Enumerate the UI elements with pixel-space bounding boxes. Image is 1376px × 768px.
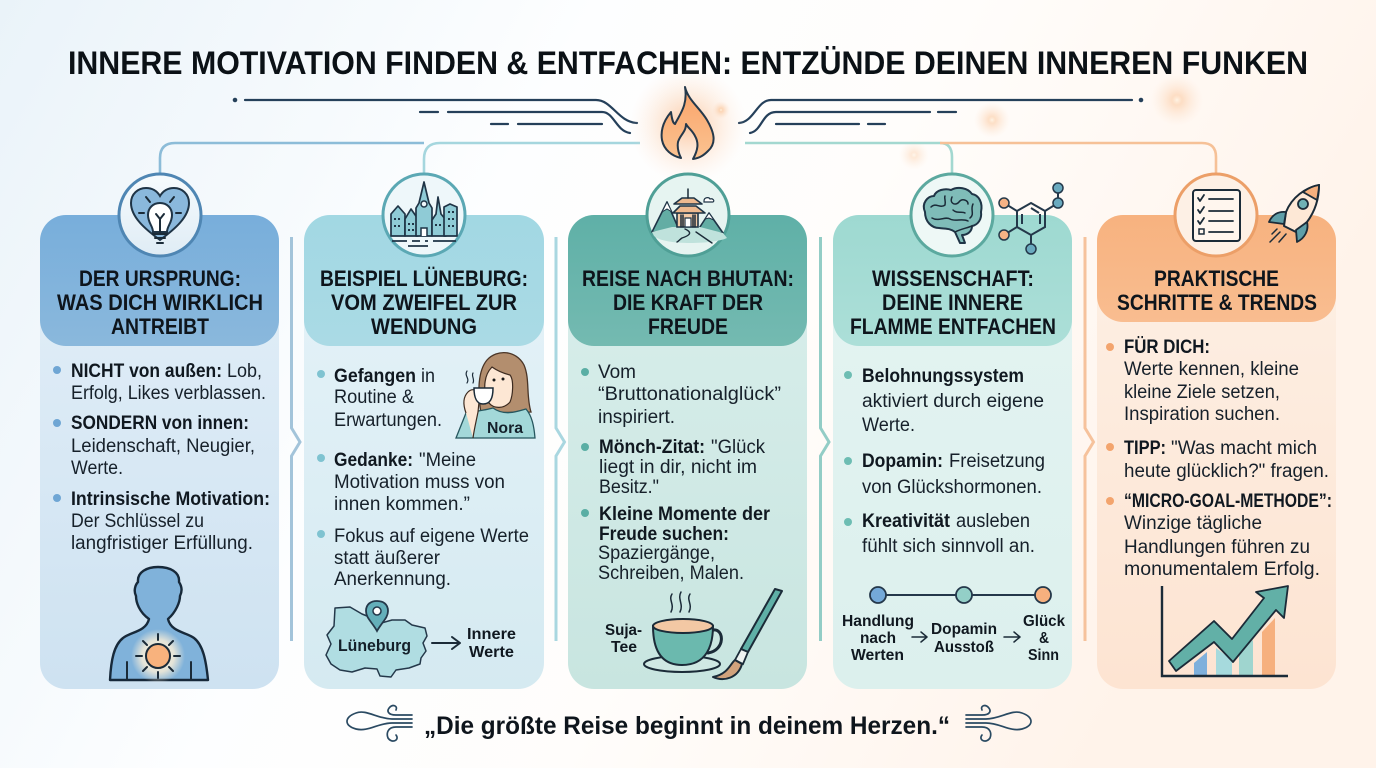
panel header 1: ANTREIBT	[111, 314, 209, 339]
illustration: Suja tea and paint brush: Tee	[611, 639, 637, 656]
map: Lüneburg to inner values: Lüneburg	[338, 636, 411, 655]
quote: „Die größte Reise beginnt in deinem Herzen.“	[424, 712, 950, 740]
icon: brain	[911, 174, 993, 256]
panel header 5: PRAKTISCHE	[1154, 266, 1279, 291]
ornament: right swirl	[966, 706, 1031, 741]
bullet list 1: Intrinsische Motivation:	[71, 489, 270, 510]
bullet list 2: Gefangen	[334, 366, 416, 387]
panel header 2: VOM ZWEIFEL ZUR	[331, 290, 517, 315]
map: Lüneburg to inner values	[326, 601, 516, 677]
icon: person with glowing sun	[110, 567, 208, 683]
panel: Wissenschaft	[833, 174, 1072, 689]
bullet list 4: Dopamin:	[862, 451, 943, 472]
bullet list 5: "Was macht mich	[1171, 438, 1317, 459]
icon: flame	[630, 67, 746, 183]
bullet list 3	[581, 362, 781, 584]
panel header 1: DER URSPRUNG:	[79, 266, 241, 291]
bullet list 4: aktiviert durch eigene	[862, 391, 1044, 412]
icon: checklist	[1175, 174, 1257, 256]
panel header 4: FLAMME ENTFACHEN	[850, 314, 1056, 339]
bullet list 3: “Bruttonationalglück”	[598, 384, 781, 405]
bullet list 1: SONDERN von innen:	[71, 413, 249, 434]
bullet list 3: inspiriert.	[598, 407, 675, 428]
bullet list 4: fühlt sich sinnvoll an.	[862, 536, 1035, 557]
bullet list 2: Anerkennung.	[334, 569, 451, 590]
flow diagram: action to dopamine to happiness: Dopamin	[931, 621, 997, 638]
bullet list 5: “MICRO-GOAL-METHODE”:	[1124, 491, 1332, 512]
icon: rocket	[1269, 185, 1319, 242]
illustration: Nora drinking tea	[456, 353, 535, 438]
panel header 3: FREUDE	[648, 314, 728, 339]
flow diagram: action to dopamine to happiness: Glück	[1023, 613, 1065, 630]
panel: Praktische Schritte	[1097, 174, 1336, 689]
flow diagram: action to dopamine to happiness: Ausstoß	[934, 639, 995, 656]
panel: Der Ursprung	[40, 174, 279, 689]
panel header 1	[40, 215, 279, 346]
bullet list 3: Spaziergänge,	[598, 543, 715, 564]
ornament: left swirl	[347, 706, 412, 741]
bullet list 2: Erwartungen.	[334, 410, 442, 431]
bullet list 5: Handlungen führen zu	[1124, 537, 1310, 558]
flow diagram: action to dopamine to happiness: nach	[860, 630, 896, 647]
bullet list 3: Schreiben, Malen.	[598, 563, 744, 584]
bullet list 2: Routine &	[334, 387, 414, 408]
bullet list 3: Freude suchen:	[599, 524, 729, 545]
panel header 4	[833, 215, 1072, 346]
bullet list 3: Kleine Momente der	[599, 504, 771, 525]
bullet list 4	[844, 366, 1045, 557]
connector lines	[160, 143, 1216, 173]
bullet list 5: Winzige tägliche	[1124, 513, 1262, 534]
bullet list 5: Inspiration suchen.	[1124, 404, 1280, 425]
illustration: Suja tea and paint brush	[605, 589, 782, 679]
bullet list 3: Vom	[598, 362, 636, 383]
panel header 3: REISE NACH BHUTAN:	[582, 266, 794, 291]
bullet list 1	[53, 361, 270, 554]
panel header 4: WISSENSCHAFT:	[872, 266, 1034, 291]
flow diagram: action to dopamine to happiness: &	[1039, 630, 1049, 647]
bullet list 4: Kreativität	[862, 511, 951, 532]
bullet list 2	[317, 366, 529, 590]
bullet list 5: TIPP:	[1124, 438, 1166, 459]
bullet list 3: Mönch-Zitat:	[599, 437, 705, 458]
icon: heart with light bulb	[119, 174, 201, 256]
panel header 3: DIE KRAFT DER	[613, 290, 763, 315]
bullet list 1: Erfolg, Likes verblassen.	[71, 383, 266, 404]
bullet list 1: langfristiger Erfüllung.	[71, 533, 253, 554]
bullet list 5: heute glücklich?" fragen.	[1124, 461, 1329, 482]
panel header 4: DEINE INNERE	[882, 290, 1023, 315]
bullet list 1: Werte.	[71, 458, 123, 479]
bullet list 4: Belohnungssystem	[862, 366, 1024, 387]
quote	[347, 706, 1031, 741]
panel header 2: WENDUNG	[371, 314, 477, 339]
panel header 5: SCHRITTE & TRENDS	[1117, 290, 1317, 315]
bullet list 2: Gedanke:	[334, 450, 413, 471]
bullet list 4: Werte.	[862, 415, 915, 436]
illustration: Suja tea and paint brush: Suja-	[605, 622, 642, 639]
panel header 1: WAS DICH WIRKLICH	[57, 290, 263, 315]
bullet list 2: innen kommen.”	[334, 494, 470, 515]
panel header 2	[304, 215, 544, 346]
panel header 2: BEISPIEL LÜNEBURG:	[320, 266, 528, 291]
header ornament lines	[234, 99, 1142, 133]
bullet list 3: Besitz."	[599, 477, 659, 498]
chart: rising growth arrow with bars	[1162, 586, 1288, 676]
bullet list 2: "Meine	[419, 450, 476, 471]
bullet list 5: Werte kennen, kleine	[1124, 359, 1299, 380]
flow diagram: action to dopamine to happiness: Handlung	[842, 613, 914, 630]
bullet list 1: Leidenschaft, Neugier,	[71, 436, 255, 457]
bullet list 4: Freisetzung	[949, 451, 1045, 472]
icon: molecule	[999, 183, 1063, 254]
bullet list 1: Der Schlüssel zu	[71, 511, 204, 532]
separators	[292, 237, 1094, 641]
map: Lüneburg to inner values: Werte	[469, 644, 514, 661]
bullet list 1: NICHT von außen:	[71, 361, 222, 382]
panel header 3	[568, 215, 807, 346]
bullet list 5: kleine Ziele setzen,	[1124, 382, 1280, 403]
panel: Beispiel Lüneburg	[304, 174, 544, 689]
bullet list 2: Fokus auf eigene Werte	[334, 526, 529, 547]
bullet list 2: statt äußerer	[334, 548, 441, 569]
flow diagram: action to dopamine to happiness	[842, 587, 1065, 664]
illustration: Nora drinking tea: Nora	[487, 420, 523, 437]
bullet list 2: Motivation muss von	[334, 472, 505, 493]
icon: Bhutan temple	[647, 174, 729, 256]
panel header 5	[1097, 215, 1336, 322]
title: INNERE MOTIVATION FINDEN & ENTFACHEN: ENTZÜNDE DEINEN INNEREN FUNKEN	[68, 45, 1308, 81]
bullet list 2: in	[421, 366, 435, 387]
bullet list 4: ausleben	[956, 511, 1030, 532]
map: Lüneburg to inner values: Innere	[467, 626, 516, 643]
bullet list 3: liegt in dir, nicht im	[599, 457, 757, 478]
flow diagram: action to dopamine to happiness: Werten	[851, 647, 904, 664]
flow diagram: action to dopamine to happiness: Sinn	[1028, 647, 1059, 664]
panel: Reise nach Bhutan	[568, 174, 807, 689]
bullet list 4: von Glückshormonen.	[862, 477, 1042, 498]
bullet list 5: monumentalem Erfolg.	[1124, 559, 1320, 580]
bullet list 5	[1106, 337, 1332, 580]
bullet list 3: "Glück	[711, 437, 765, 458]
bullet list 5: FÜR DICH:	[1124, 337, 1210, 358]
icon: Lüneburg skyline	[383, 174, 465, 256]
bullet list 1: Lob,	[227, 361, 262, 382]
